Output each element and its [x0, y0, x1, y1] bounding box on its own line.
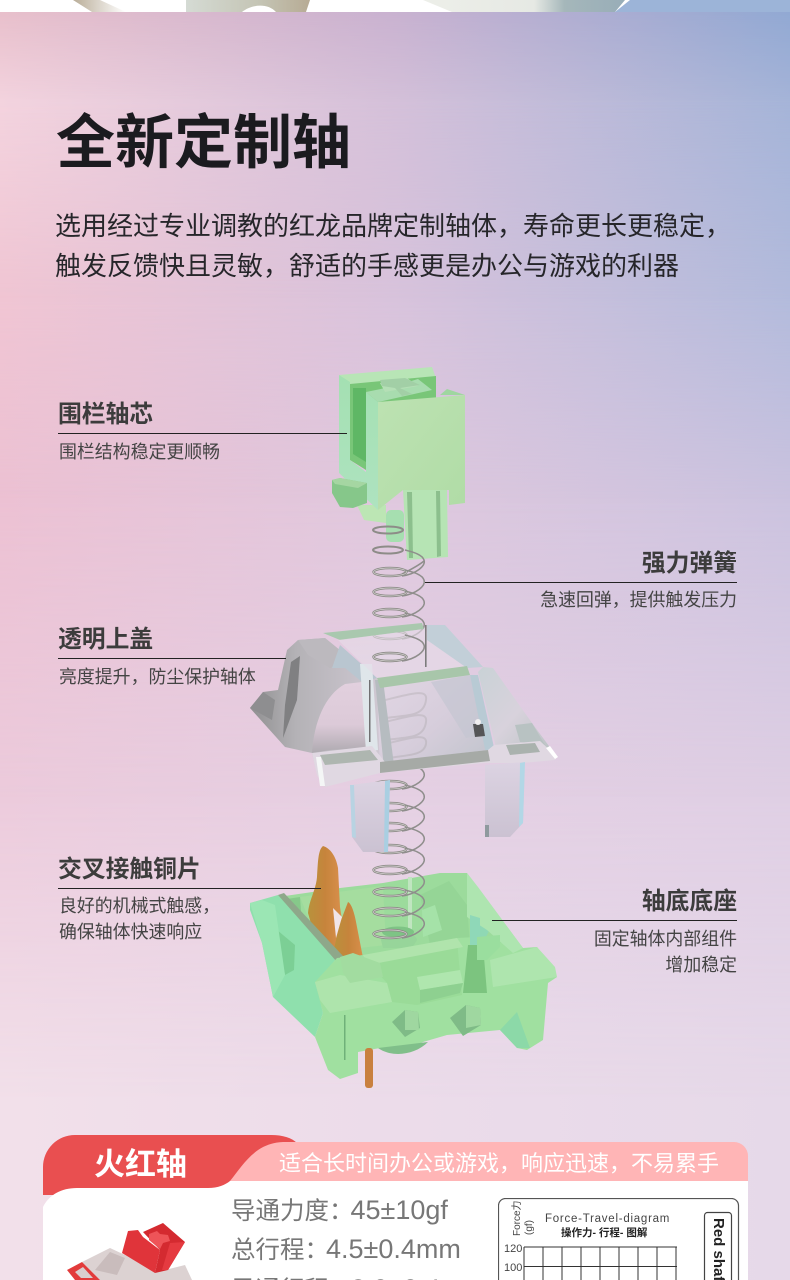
- housing back bar: [323, 623, 424, 640]
- callout: base note: 固定轴体内部组件: [594, 929, 737, 949]
- housing left leg: [350, 780, 390, 852]
- callout: housing heading: 透明上盖: [58, 626, 153, 653]
- icon: spring lower coils: [374, 763, 424, 853]
- text: 确保轴体快速响应: [59, 922, 202, 942]
- top photo strip: [73, 0, 790, 12]
- icon: transparent housing: [250, 623, 558, 852]
- icon: keycap stem: [332, 367, 465, 560]
- callout: spring note: 急速回弹，提供触发压力: [540, 590, 737, 610]
- callout line: stem: [58, 432, 347, 434]
- base back wall post: [408, 877, 412, 962]
- callout: stem heading: 围栏轴芯: [58, 401, 153, 428]
- slogan: 适合长时间办公或游戏，响应迅速，不易累手: [279, 1151, 719, 1176]
- housing left dome: [250, 638, 380, 787]
- force travel chart: 120: [504, 1243, 522, 1255]
- force travel chart: (gf): [524, 1220, 535, 1235]
- card white body: [43, 1181, 748, 1280]
- callout line: base: [492, 920, 737, 922]
- housing right leg: [485, 762, 525, 837]
- force travel chart: 100: [504, 1262, 522, 1274]
- base left corner block: [315, 975, 392, 1013]
- card red tab: [43, 1135, 297, 1235]
- callout: spring heading: 强力弹簧: [642, 550, 737, 577]
- base copper pin: [365, 1048, 373, 1088]
- callout: copper heading: 交叉接触铜片: [58, 856, 201, 883]
- callout: base note: [594, 929, 737, 975]
- base body backing: [315, 937, 557, 1079]
- housing front face: [377, 675, 487, 766]
- base front wall: [363, 940, 462, 1005]
- callout line: copper: [58, 888, 321, 890]
- housing right dome: [478, 667, 557, 757]
- text: 增加稳定: [665, 955, 737, 975]
- base small right block: [477, 935, 500, 960]
- base right rim: [467, 873, 523, 953]
- panel: red switch card: [43, 1135, 748, 1280]
- base centre pin socket: [381, 933, 417, 948]
- icon: green base: [250, 846, 557, 1088]
- title: 全新定制轴: [56, 110, 351, 176]
- spec: actuation force: 导通力度：45±10gf: [231, 1195, 448, 1225]
- card pink header: [230, 1142, 748, 1181]
- callout: base heading: 轴底底座: [642, 888, 737, 915]
- housing right post: [427, 625, 483, 668]
- intro paragraph: [55, 211, 731, 280]
- base gap: [463, 945, 487, 993]
- force travel chart: Force力: [510, 1200, 523, 1236]
- force travel chart: 操作力- 行程- 图解: [561, 1226, 648, 1239]
- spec: total travel: 总行程：4.5±0.4mm: [231, 1234, 461, 1264]
- callout: housing note: 亮度提升，防尘保护轴体: [59, 667, 256, 687]
- base right block: [490, 947, 557, 987]
- housing arch window: [312, 682, 370, 753]
- base left wall: [250, 895, 337, 1037]
- base feet details: [500, 1012, 530, 1048]
- tab label: 火红轴: [94, 1147, 187, 1182]
- base middle block: [417, 970, 463, 990]
- force travel chart: Force-Travel-diagram: [545, 1213, 670, 1225]
- housing centre opening: [338, 629, 467, 678]
- housing rim: [312, 741, 557, 787]
- callout: copper note: [59, 896, 220, 942]
- icon: spring upper coils: [373, 526, 424, 661]
- force travel chart: [498, 1198, 740, 1280]
- callout: copper note: 良好的机械式触感，: [59, 896, 220, 916]
- callout line: spring: [425, 582, 737, 584]
- housing front bar: [377, 666, 470, 688]
- base cavity: [278, 873, 523, 965]
- icon: copper contact leaves: [308, 846, 364, 963]
- intro paragraph: 触发反馈快且灵敏，舒适的手感更是办公与游戏的利器: [55, 250, 679, 280]
- red switch picture: [67, 1223, 192, 1280]
- intro paragraph: 选用经过专业调教的红龙品牌定制轴体，寿命更长更稳定，: [55, 211, 731, 241]
- callout line: housing: [58, 658, 286, 660]
- callout: stem note: 围栏结构稳定更顺畅: [59, 442, 220, 462]
